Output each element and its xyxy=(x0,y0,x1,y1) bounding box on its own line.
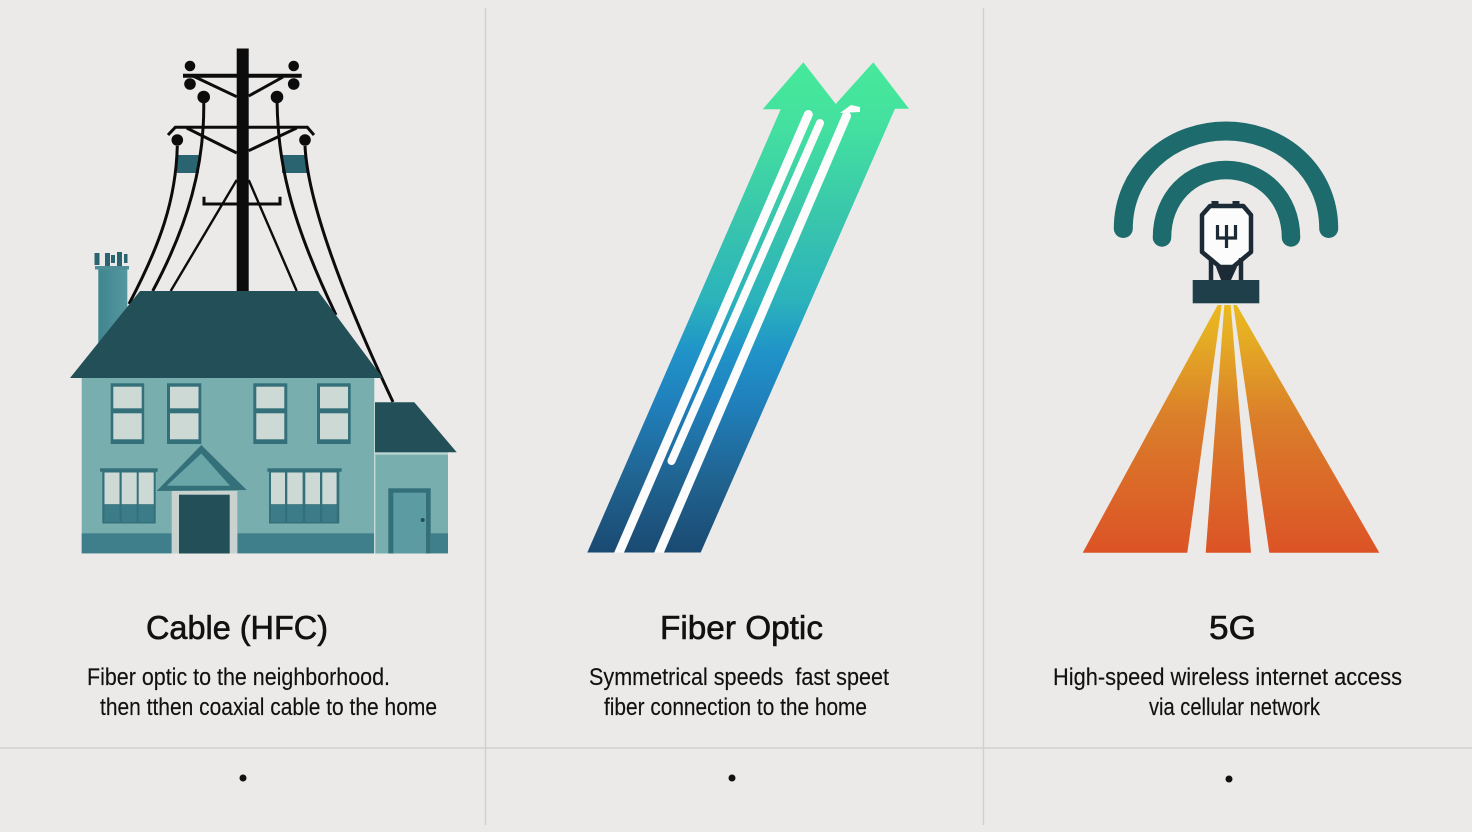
description: 5G: High-speed wireless internet access xyxy=(1053,664,1402,691)
description: cable: Fiber optic to the neighborhood. xyxy=(87,664,390,691)
pole and crossarms xyxy=(129,48,393,402)
description: cable: then tthen coaxial cable to the home xyxy=(100,694,437,721)
illustration: utility pole with wires xyxy=(129,48,393,402)
strand arrow tip xyxy=(840,105,860,113)
heading: fiber: Fiber Optic xyxy=(660,609,823,646)
description: cable xyxy=(87,664,437,721)
lower right window xyxy=(267,468,342,524)
chimney xyxy=(94,252,129,343)
main walls xyxy=(82,378,374,554)
main roof xyxy=(70,291,383,378)
icon: teal transformer boxes xyxy=(177,155,307,173)
insulators xyxy=(172,61,311,146)
dot marker xyxy=(240,774,246,782)
antenna base xyxy=(1193,280,1259,303)
porch gable xyxy=(157,445,247,491)
heading: 5G: 5G xyxy=(1209,609,1256,646)
upper windows xyxy=(111,383,351,444)
front door xyxy=(172,491,237,554)
illustration: house xyxy=(70,252,457,554)
signal beams xyxy=(1083,305,1379,553)
side extension xyxy=(374,402,457,554)
base band xyxy=(82,533,374,553)
panel: cable (HFC) xyxy=(70,48,457,782)
description: fiber: fiber connection to the home xyxy=(604,694,867,721)
signal arcs xyxy=(1123,131,1329,238)
description: fiber: Symmetrical speeds fast speet xyxy=(589,664,889,691)
antenna device xyxy=(1202,201,1251,281)
white fiber strands xyxy=(615,114,846,562)
lower left window xyxy=(100,468,158,524)
panel: fiber optic xyxy=(587,62,909,782)
illustration: antenna with signal waves and beams xyxy=(1083,131,1379,553)
dot marker xyxy=(728,774,736,782)
description: fiber xyxy=(589,664,889,721)
heading: cable: Cable (HFC) xyxy=(146,609,328,646)
dot marker xyxy=(1226,776,1232,782)
illustration: double arrow with fiber strands xyxy=(587,62,909,562)
description: 5G: via cellular network xyxy=(1149,694,1321,721)
panel: 5G xyxy=(1053,131,1402,782)
description: 5G xyxy=(1053,664,1402,721)
arrow body xyxy=(587,62,909,553)
